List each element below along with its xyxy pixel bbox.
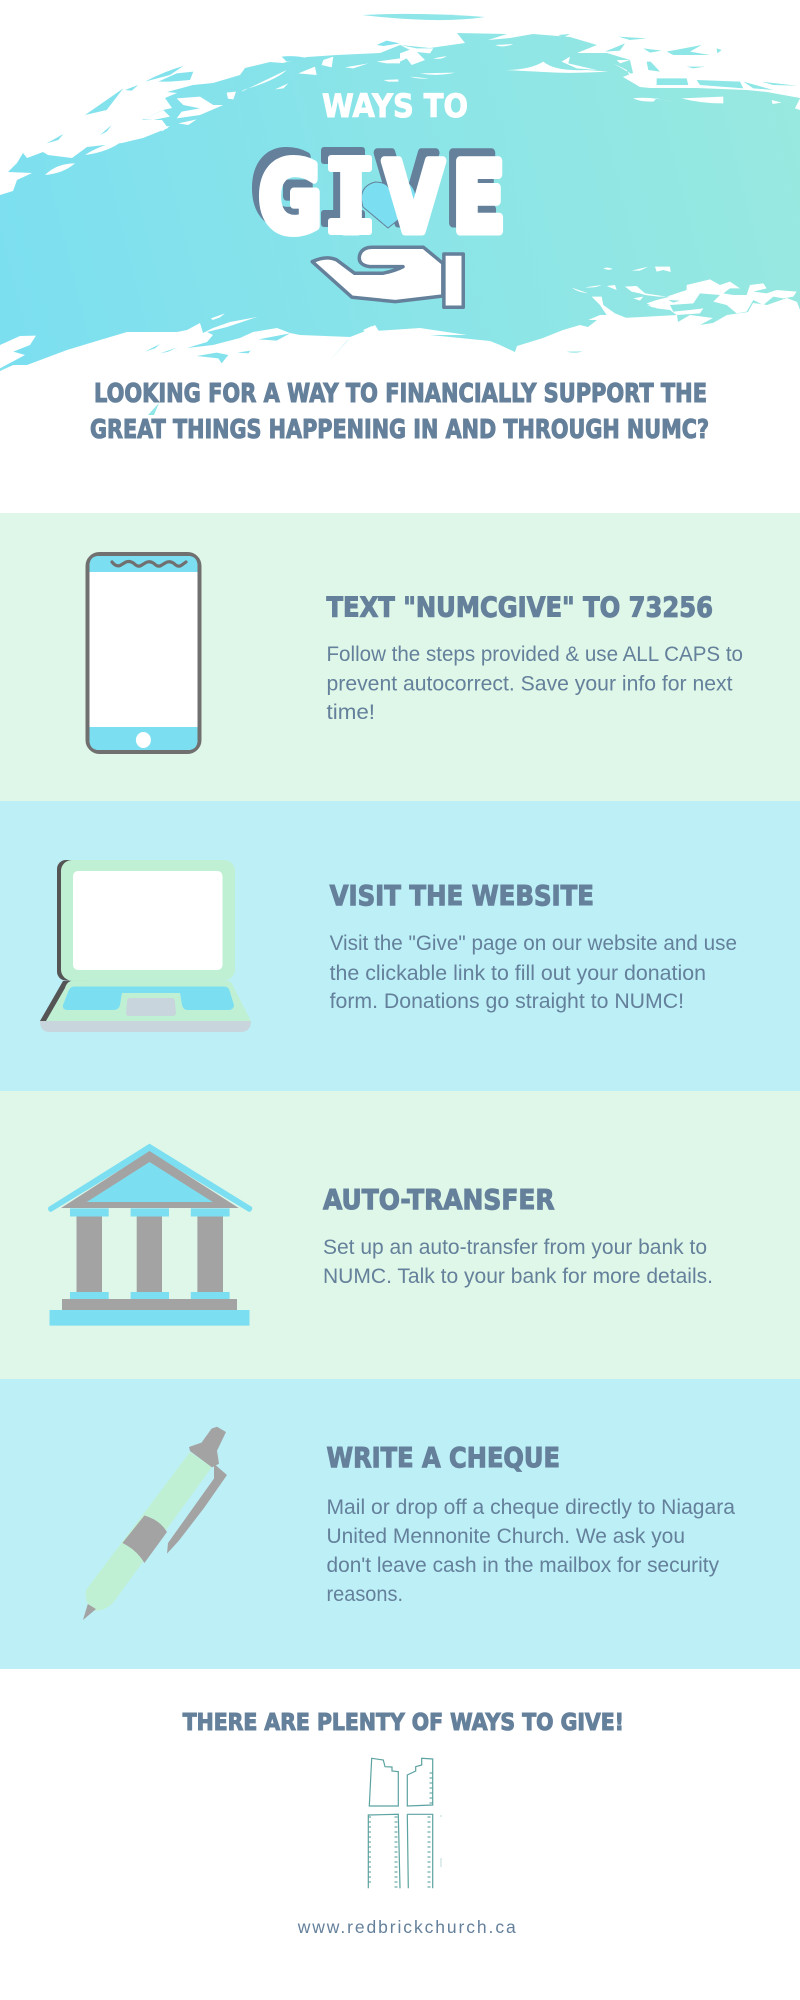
heading: visit the website: VISIT THE WEBSITE [330,879,594,912]
body text: auto-transfer instructions: Set up an auto-transfer from your bank to [323,1236,707,1259]
title: give: GIVE [259,142,505,254]
heading: write a cheque: WRITE A CHEQUE [326,1441,560,1474]
body text: website instructions: form. Donations go straight to NUMC! [330,990,684,1013]
title: ways to: WAYS TO [322,87,468,125]
body text: auto-transfer instructions: NUMC. Talk to your bank for more details. [323,1265,713,1288]
footer heading: THERE ARE PLENTY OF WAYS TO GIVE! [183,1710,624,1736]
body text: cheque instructions [326,1496,735,1606]
heading: text numcgive: TEXT "NUMCGIVE" TO 73256 [326,590,713,624]
panel: website [0,801,800,1091]
footer website: www.redbrickchurch.ca [297,1917,516,1937]
panel: auto-transfer [0,1091,800,1379]
icon: laptop [40,860,251,1032]
body text: text instructions [326,643,743,724]
panel: cheque [0,1379,800,1669]
panel: text to give [0,513,800,801]
body text: cheque instructions: don't leave cash in the mailbox for security [326,1554,719,1577]
body text: text instructions: time! [326,701,375,724]
icon: bank [48,1144,252,1326]
body text: website instructions: the clickable link to fill out your donation [330,962,706,985]
body text: cheque instructions: reasons. [326,1583,403,1606]
heading: auto-transfer: AUTO-TRANSFER [323,1183,555,1216]
subheading: question [90,379,709,445]
title: give: GIVE [252,134,498,246]
body text: text instructions: Follow the steps provided & use ALL CAPS to [326,643,743,666]
body text: website instructions [330,932,737,1013]
header brush stroke [0,14,800,415]
icon: pen [83,1427,227,1620]
icon: sketched cross logo [368,1758,441,1888]
body text: text instructions: prevent autocorrect. Save your info for next [326,672,733,696]
body text: website instructions: Visit the "Give" page on our website and use [330,932,737,955]
body text: cheque instructions: Mail or drop off a cheque directly to Niagara [326,1496,735,1519]
body text: auto-transfer instructions [323,1236,713,1288]
icon: open hand [312,247,463,307]
body text: cheque instructions: United Mennonite Church. We ask you [326,1525,685,1548]
icon: heart [362,182,416,228]
icon: smartphone [88,554,200,752]
